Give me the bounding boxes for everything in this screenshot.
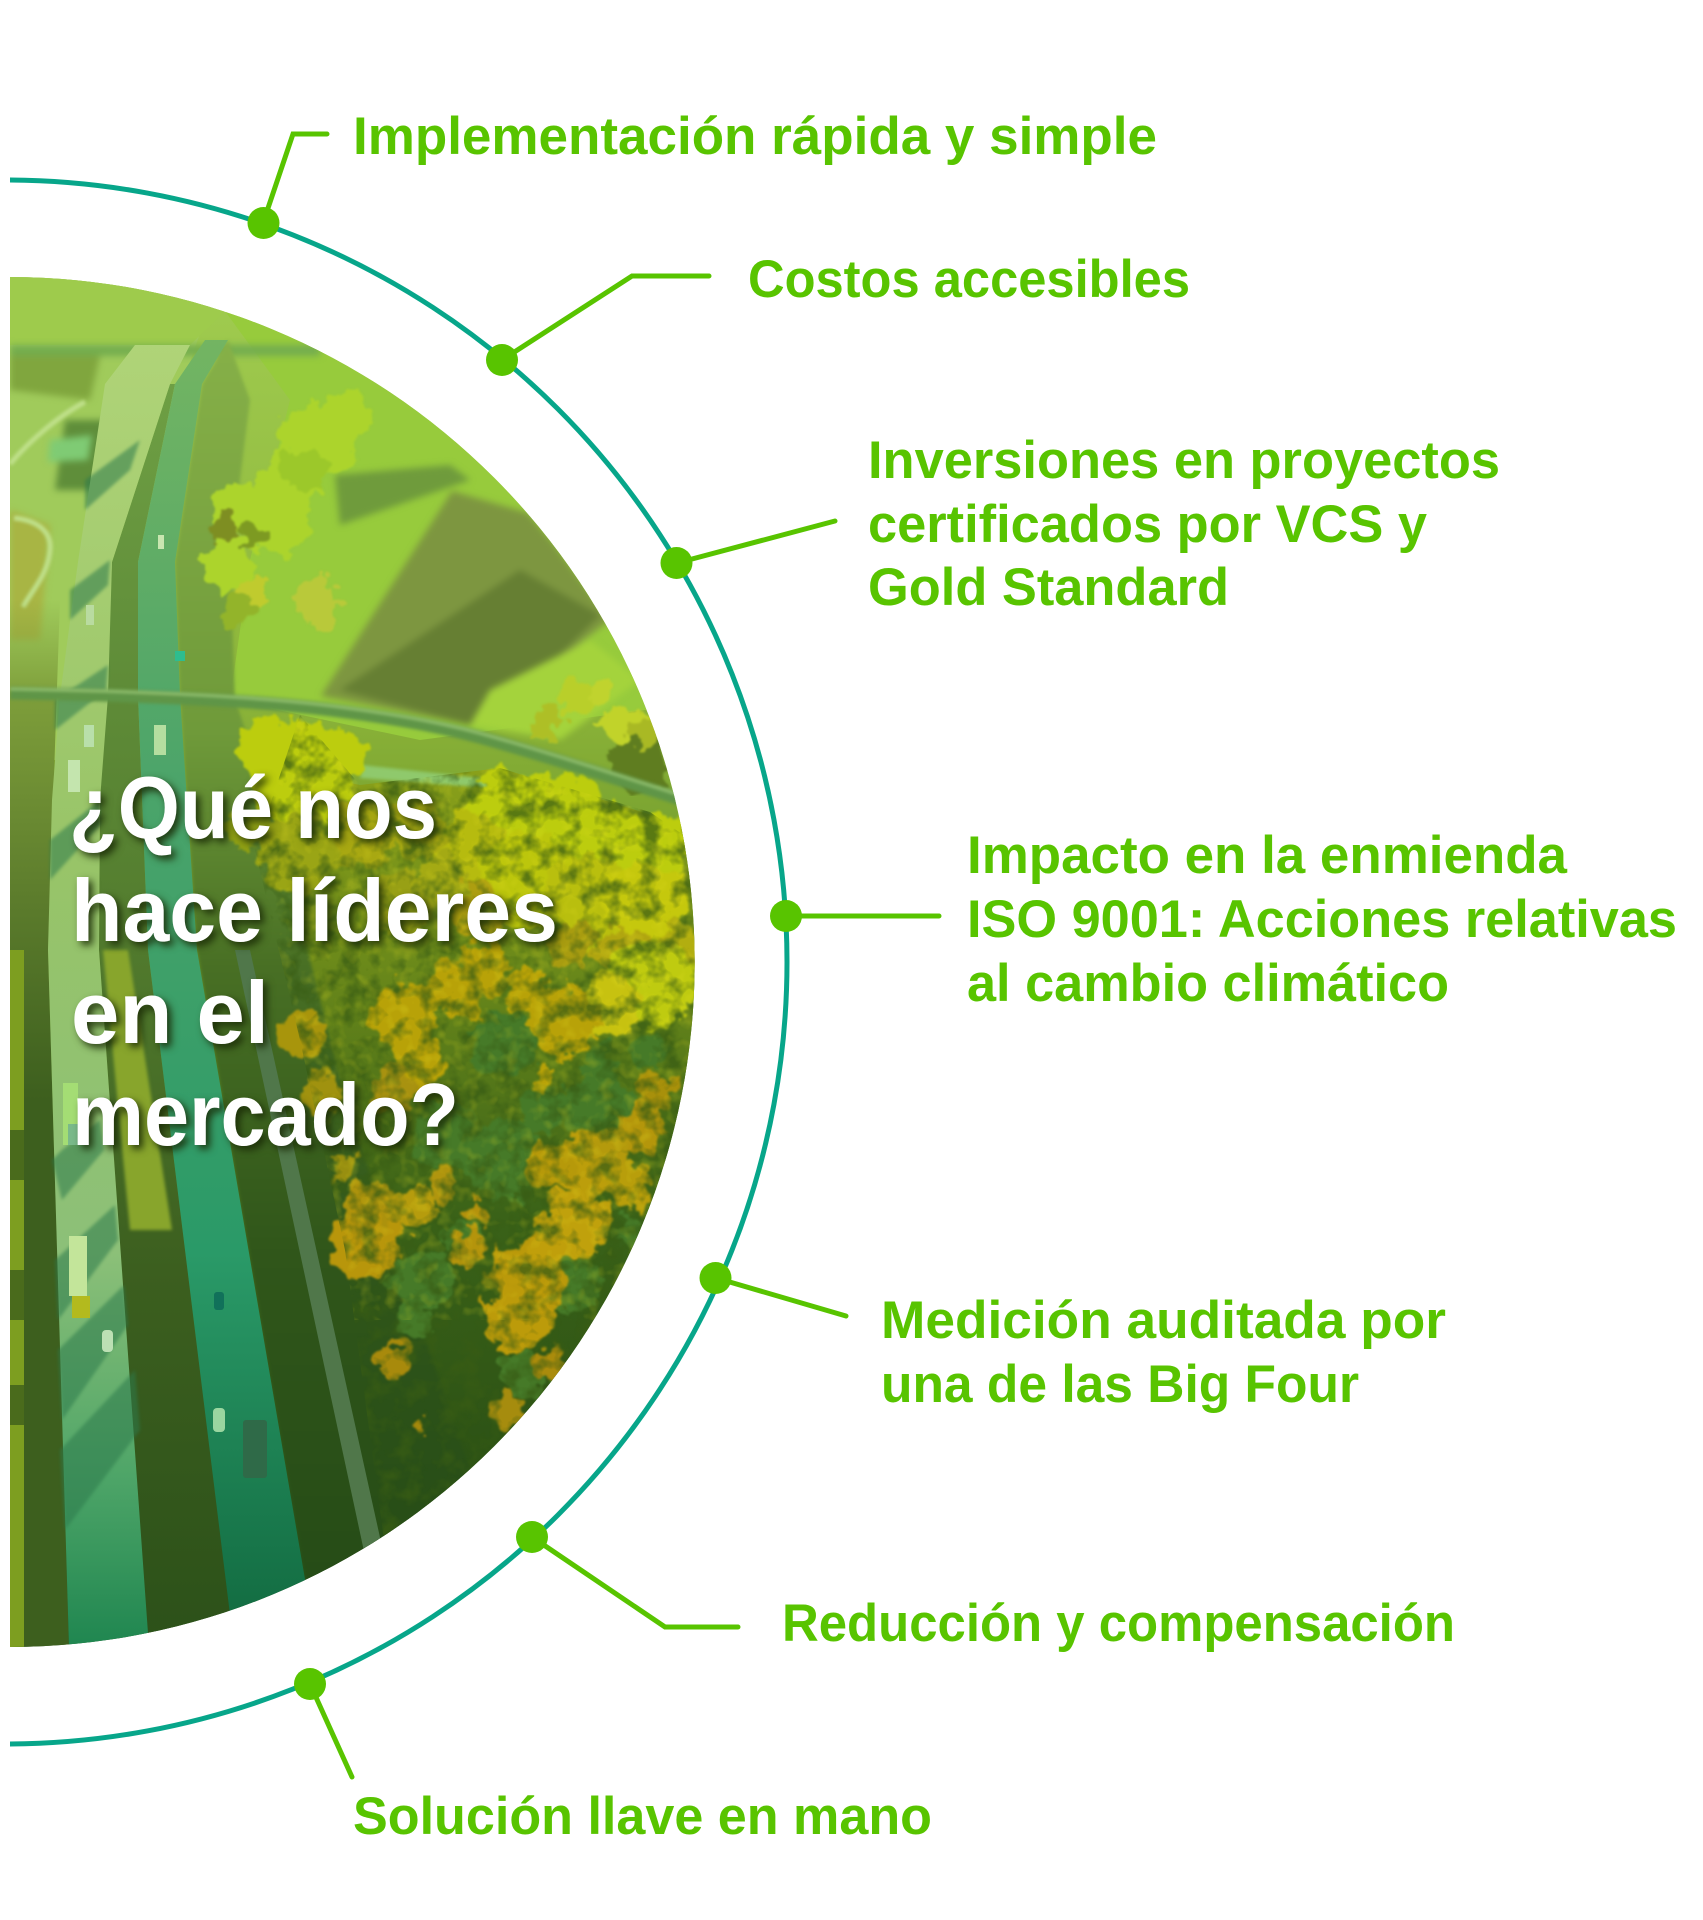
field: dark ploughed bands	[321, 465, 640, 740]
field: bright top field	[226, 312, 646, 740]
item 4: Impacto en la enmienda ISO 9001	[770, 826, 1677, 1013]
strip between carriageways	[99, 384, 234, 1647]
title: Que nos hace lideres en el mercado	[69, 758, 558, 1164]
right edge trees above bridge	[531, 676, 670, 790]
item 4: Impacto en la enmienda ISO 9001: al cambio climático	[967, 954, 1449, 1013]
highway left carriageway	[48, 345, 190, 1647]
canopy: green trees	[390, 1009, 666, 1398]
side road curves	[10, 402, 85, 607]
highway right carriageway	[138, 340, 312, 1647]
rail corridor right of highway	[175, 340, 480, 1660]
title: Que nos hace lideres en el mercado: en el	[71, 963, 269, 1062]
item 4: Impacto en la enmienda ISO 9001: Impacto en la enmienda	[967, 826, 1568, 885]
item 3: Inversiones en proyectos certificados: Gold Standard	[868, 558, 1229, 617]
vehicles	[63, 535, 267, 1478]
item 2: Costos accesibles: Costos accesibles	[748, 250, 1190, 309]
item 7: Solucion llave en mano: Solución llave en mano	[353, 1787, 932, 1846]
item 3: Inversiones en proyectos certificados: certificados por VCS y	[868, 495, 1428, 554]
photo: aerial highway and forest in half circle	[0, 270, 720, 1660]
item 4: Impacto en la enmienda ISO 9001: ISO 9001: Acciones relativas	[967, 890, 1677, 949]
item 3: Inversiones en proyectos certificados	[660, 431, 1500, 617]
road shadows	[50, 440, 140, 1530]
item 6: Reduccion y compensacion	[516, 1521, 1455, 1653]
canopy: gold and yellow trees	[279, 941, 696, 1432]
title: Que nos hace lideres en el mercado: mercado?	[72, 1065, 459, 1164]
canopy: upper yellow-lime forest	[230, 715, 706, 976]
item 1: Implementacion rapida y simple: Implementación rápida y simple	[353, 107, 1157, 166]
item 2: Costos accesibles	[486, 250, 1190, 376]
pale ramp under bridge	[360, 765, 490, 788]
forest mass	[308, 769, 695, 1570]
left margin strips	[10, 600, 69, 1647]
item 6: Reduccion y compensacion: Reducción y compensación	[782, 1594, 1455, 1653]
ring: teal circle arc	[0, 180, 787, 1744]
title: Que nos hace lideres en el mercado: ¿Qué nos	[69, 758, 437, 857]
upper lime trees	[202, 391, 369, 627]
item 3: Inversiones en proyectos certificados: Inversiones en proyectos	[868, 431, 1500, 490]
bridge across	[10, 689, 690, 802]
field: left side pale ground	[10, 277, 220, 760]
item 5: Medicion auditada por una de las Big Four	[700, 1262, 1446, 1414]
canopy texture	[230, 700, 710, 1660]
item 1: Implementacion rapida y simple	[248, 107, 1157, 239]
item 5: Medicion auditada por una de las Big Four: Medición auditada por	[881, 1291, 1446, 1350]
item 5: Medicion auditada por una de las Big Four: una de las Big Four	[881, 1355, 1359, 1414]
item 7: Solucion llave en mano	[294, 1668, 932, 1846]
title: Que nos hace lideres en el mercado: hace líderes	[71, 861, 558, 960]
